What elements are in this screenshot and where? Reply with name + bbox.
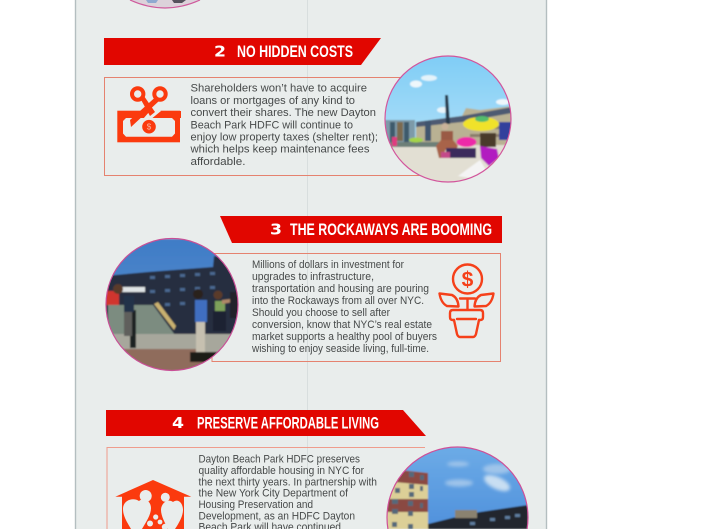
text: preserve affordable living: Development, as an HDFC Dayton: [198, 510, 355, 522]
text: preserve affordable living: quality affordable housing in NYC for: [198, 465, 364, 477]
icon: scissors cutting money: $: [147, 123, 152, 132]
text: preserve affordable living: Dayton Beach Park HDFC preserves: [198, 454, 360, 466]
text: no hidden costs: convert their shares. The new Dayton: [190, 107, 376, 119]
photo: people on boardwalk: [105, 238, 240, 371]
text: rockaways booming: Should you choose to sell after: [252, 307, 390, 319]
text: no hidden costs: Shareholders won’t have to acquire: [190, 83, 367, 95]
text: rockaways booming: market supports a healthy pool of buyers: [252, 331, 437, 343]
text: preserve affordable living: the New York City Department of: [198, 488, 349, 500]
text: preserve affordable living: [198, 454, 377, 529]
icon: house with hearts: [115, 480, 191, 529]
banner: 3 the rockaways are booming: 3: [270, 220, 282, 238]
icon: money plant in pot: [440, 264, 494, 337]
text: no hidden costs: Beach Park HDFC will continue to: [190, 119, 353, 131]
photo: beach scene: [385, 56, 512, 182]
text: no hidden costs: affordable.: [190, 156, 246, 168]
banner: 2 no hidden costs: 2: [214, 42, 226, 60]
panel: rockaways booming: [212, 254, 500, 362]
banner: 3 the rockaways are booming: THE ROCKAWAYS ARE BOOMING: [290, 221, 492, 239]
banner: 4 preserve affordable living: [106, 410, 426, 436]
photo: previous section circle remnant: [130, 0, 200, 8]
text: rockaways booming: into the Rockaways from all over NYC.: [252, 295, 424, 307]
text: rockaways booming: transportation and housing are pouring: [252, 283, 429, 295]
text: rockaways booming: conversion, know that NYC’s real estate: [252, 319, 432, 331]
banner: 3 the rockaways are booming: [220, 216, 502, 243]
background panel: [76, 0, 546, 529]
text: no hidden costs: loans or mortgages of any kind to: [190, 95, 355, 107]
text: rockaways booming: Millions of dollars in investment for: [252, 259, 404, 271]
text: no hidden costs: enjoy low property taxes (shelter rent);: [190, 132, 378, 144]
banner: 4 preserve affordable living: PRESERVE AFFORDABLE LIVING: [197, 414, 379, 432]
photo: apartment buildings and sky: [387, 447, 528, 529]
panel: preserve affordable living: [107, 448, 425, 529]
text: rockaways booming: wishing to enjoy seaside living, full-time.: [251, 343, 429, 355]
panel: no hidden costs: [104, 78, 424, 176]
banner: 2 no hidden costs: [104, 38, 381, 65]
banner: 4 preserve affordable living: 4: [172, 414, 184, 432]
text: rockaways booming: upgrades to infrastructure,: [252, 271, 374, 283]
text: no hidden costs: which helps keep maintenance fees: [189, 144, 370, 156]
text: preserve affordable living: the next thirty years. In partnership with: [198, 476, 377, 488]
text: no hidden costs: [189, 83, 378, 168]
icon: money plant in pot: $: [462, 268, 474, 292]
banner: 2 no hidden costs: NO HIDDEN COSTS: [237, 43, 353, 61]
icon: scissors cutting money: [117, 88, 181, 142]
text: rockaways booming: [251, 259, 437, 355]
text: preserve affordable living: Housing Preservation and: [198, 499, 313, 511]
